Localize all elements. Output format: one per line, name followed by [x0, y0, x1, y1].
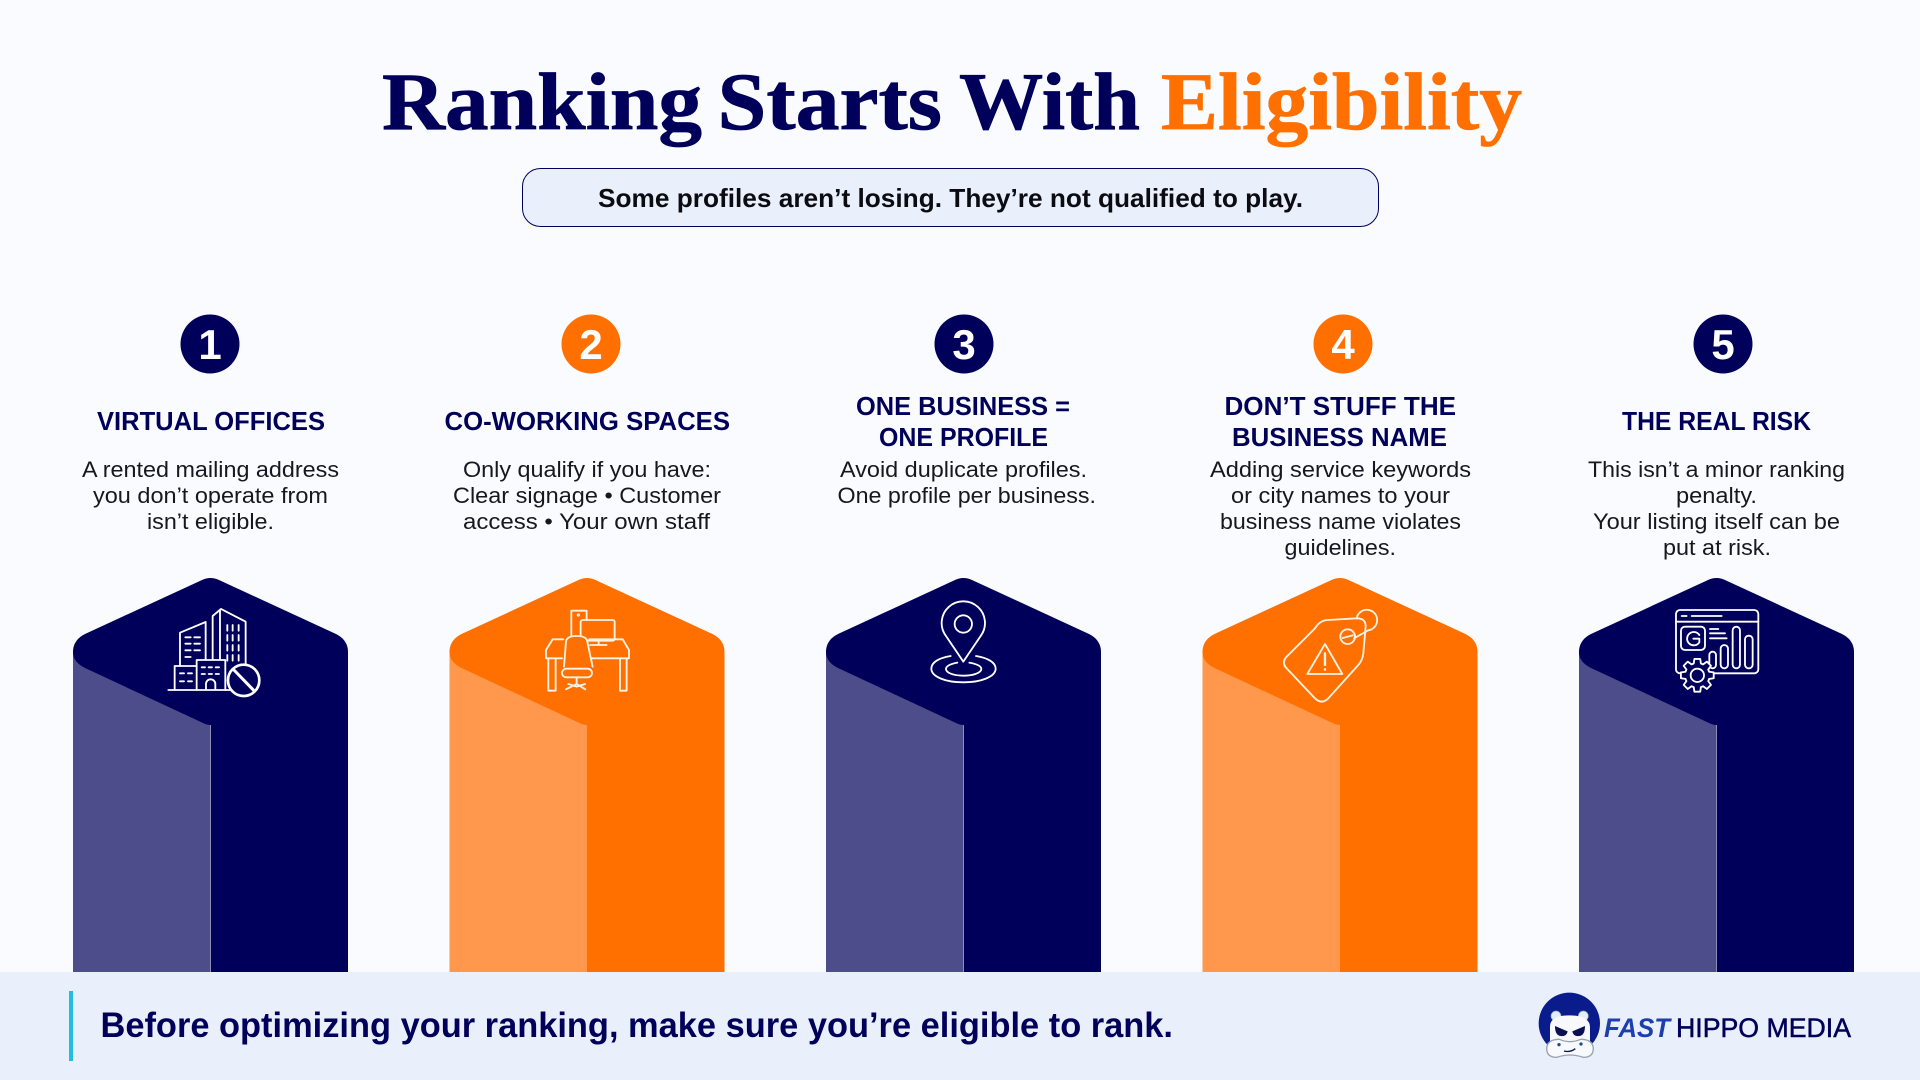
text: real risk description: put at risk.: [1663, 535, 1771, 560]
icon: office buildings with prohibition sign: [168, 609, 259, 696]
text: virtual offices description: [82, 457, 339, 534]
text: real risk description: penalty.: [1676, 483, 1757, 508]
title: Starts: [718, 56, 942, 147]
accent bar: [69, 991, 73, 1061]
panel: co-working spaces: [444, 314, 730, 972]
pillar 2: [450, 578, 724, 972]
text: business name description: [1210, 457, 1471, 560]
icon: warning price tag: [1284, 610, 1377, 702]
text: business name description: or city names to your: [1231, 483, 1450, 508]
number badge 3: [934, 314, 994, 374]
text: co-working spaces description: Only qualify if you have:: [463, 457, 711, 482]
icon: analytics dashboard with gear: [1676, 610, 1758, 692]
heading: virtual offices: VIRTUAL OFFICES: [97, 406, 325, 436]
subtitle pill: Some profiles aren’t losing. They’re not qualified to play.: [598, 183, 1303, 213]
text: business name description: Adding service keywords: [1210, 457, 1471, 482]
heading: one business equals one profile: [856, 391, 1070, 452]
text: co-working spaces description: [453, 457, 721, 534]
text: virtual offices description: A rented mailing address: [82, 457, 339, 482]
text: real risk description: This isn’t a minor ranking: [1588, 457, 1845, 482]
text: one profile description: Avoid duplicate profiles.: [840, 457, 1087, 482]
text: one profile description: One profile per business.: [838, 483, 1096, 508]
heading: don't stuff the business name: BUSINESS NAME: [1232, 422, 1447, 452]
heading: don't stuff the business name: [1224, 391, 1456, 452]
icon: location pin: [931, 601, 996, 682]
text: real risk description: Your listing itself can be: [1593, 509, 1840, 534]
number badge 2: [562, 314, 620, 374]
text: one profile description: [838, 457, 1096, 508]
heading: co-working spaces: CO-WORKING SPACES: [444, 406, 730, 436]
panel: the real risk: [1579, 314, 1854, 972]
heading: don't stuff the business name: DON’T STUFF THE: [1224, 391, 1456, 421]
text: business name description: business name violates: [1220, 509, 1461, 534]
icon: hippo mascot: [1539, 993, 1600, 1057]
heading: the real risk: THE REAL RISK: [1622, 406, 1811, 436]
pillar 1: [73, 578, 348, 972]
number badge 1: 1: [198, 321, 222, 368]
subtitle pill: [522, 168, 1378, 226]
heading: one business equals one profile: ONE BUSINESS =: [856, 391, 1070, 421]
text: virtual offices description: you don’t operate from: [93, 483, 328, 508]
logo: fast hippo media: [1539, 993, 1851, 1057]
text: business name description: guidelines.: [1284, 535, 1396, 560]
number badge 4: 4: [1331, 321, 1355, 368]
text: virtual offices description: isn’t eligible.: [147, 509, 274, 534]
panel: virtual offices: [73, 314, 348, 972]
number badge 4: [1314, 314, 1372, 374]
footer message: Before optimizing your ranking, make sure you’re eligible to rank.: [100, 1006, 1173, 1045]
number badge 2: 2: [579, 321, 603, 368]
pillar 4: [1202, 578, 1478, 972]
panel: business name: [1202, 314, 1478, 972]
panel: one business one profile: [826, 314, 1101, 972]
number badge 3: 3: [952, 321, 976, 368]
text: co-working spaces description: access • Your own staff: [463, 509, 711, 534]
text: real risk description: [1588, 457, 1845, 560]
title: Ranking: [382, 56, 702, 147]
text: co-working spaces description: Clear signage • Customer: [453, 483, 721, 508]
title: [382, 56, 1522, 147]
heading: one business equals one profile: ONE PROFILE: [879, 422, 1048, 452]
title: With: [959, 56, 1140, 147]
title: Eligibility: [1161, 56, 1522, 147]
number badge 5: [1694, 314, 1752, 374]
logo: fast hippo media: FAST: [1604, 1013, 1672, 1043]
pillar 3: [826, 578, 1101, 972]
number badge 1: [180, 314, 240, 374]
footer bar: [0, 972, 1920, 1080]
pillar 5: [1579, 578, 1854, 972]
icon: desk with chair and computer: [546, 611, 629, 691]
logo: fast hippo media: HIPPO MEDIA: [1676, 1013, 1851, 1043]
number badge 5: 5: [1711, 321, 1735, 368]
